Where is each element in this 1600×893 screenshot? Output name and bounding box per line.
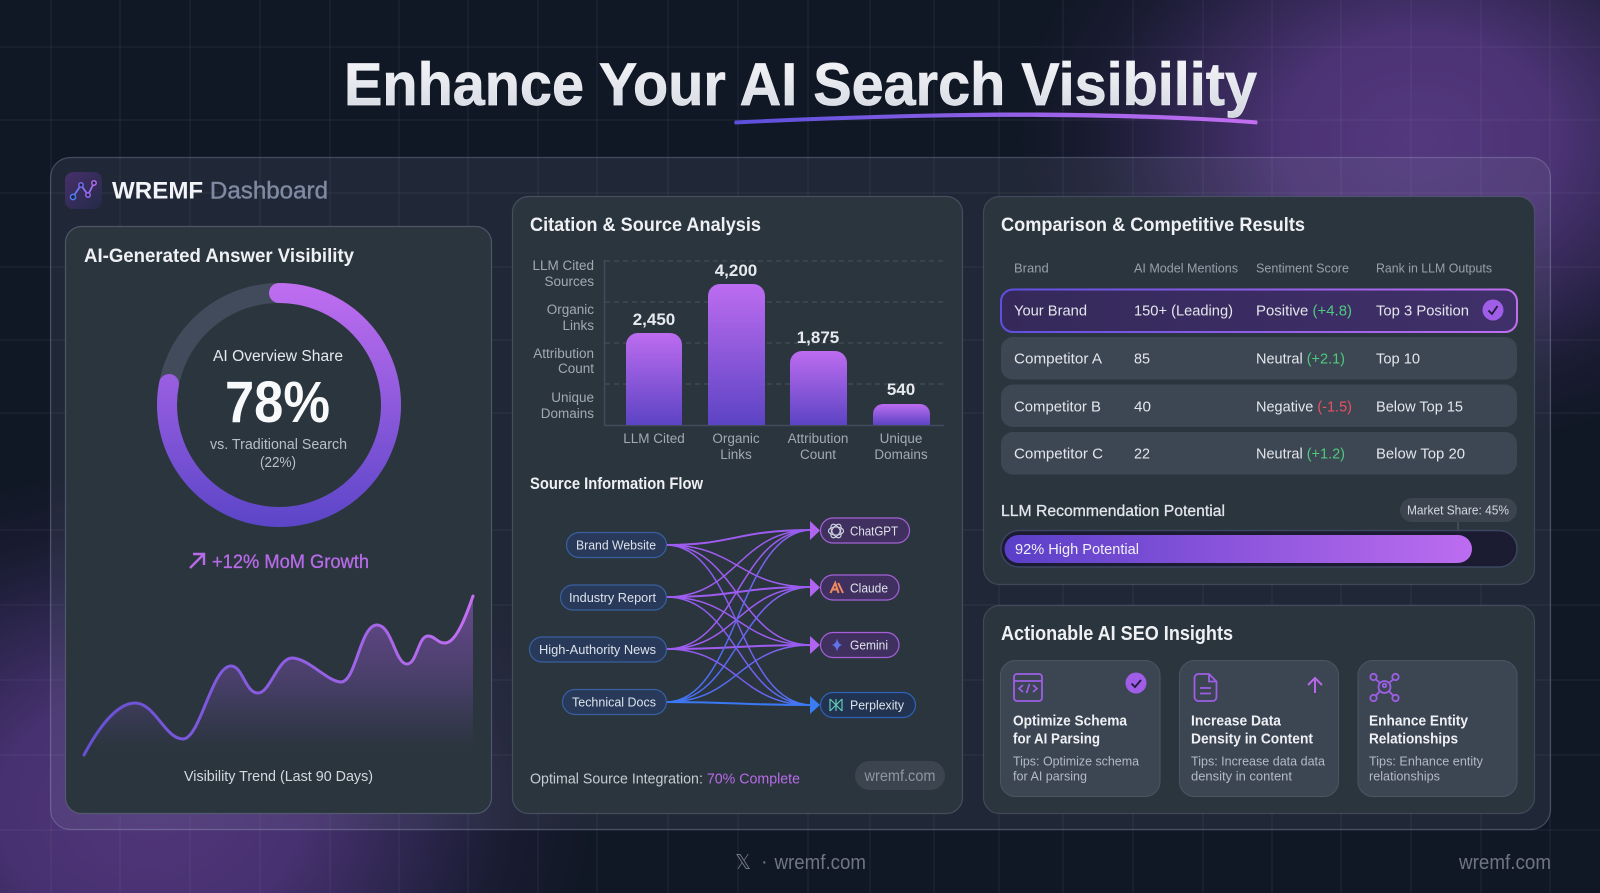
insight card: entity: Enhance Entity — [1369, 712, 1469, 730]
insight card: data density: Tips: Increase data data — [1191, 754, 1326, 768]
footer center: 𝕏 — [735, 850, 751, 874]
footer right: wremf.com — [1458, 852, 1551, 874]
footer center — [735, 850, 866, 874]
source pills — [530, 532, 666, 714]
bar values: 540 — [887, 380, 915, 399]
donut chart: AI Overview Share — [213, 348, 343, 365]
row: your brand — [1001, 290, 1517, 332]
table header: Rank in LLM Outputs — [1376, 260, 1492, 276]
icon: network — [1370, 674, 1399, 701]
row: competitor A: Top 10 — [1376, 350, 1420, 368]
source pills: Technical Docs — [572, 694, 656, 710]
y-axis labels: Count — [558, 361, 594, 376]
dashboard name: WREMF Dashboard — [112, 178, 328, 204]
donut chart: (22%) — [260, 455, 296, 471]
insight card: entity: Tips: Enhance entity — [1369, 754, 1483, 768]
x-axis labels: LLM Cited — [623, 431, 685, 446]
watermark pill: wremf.com — [864, 768, 936, 785]
footer center: wremf.com — [774, 852, 866, 874]
market share pill: Market Share: 45% — [1407, 504, 1509, 518]
area chart: visibility trend — [84, 596, 473, 755]
target: Gemini: Gemini — [850, 638, 888, 652]
watermark pill — [855, 761, 945, 790]
market share pill — [1400, 498, 1517, 532]
source pills: Brand Website — [576, 538, 656, 552]
y-axis labels: Attribution — [533, 346, 594, 361]
insight card: schema: Tips: Optimize schema — [1013, 754, 1140, 768]
insight card: schema: Optimize Schema — [1013, 712, 1128, 730]
icon: check badge — [1126, 672, 1146, 694]
row: competitor B: Negative (-1.5) — [1256, 398, 1352, 416]
target: Claude — [820, 575, 899, 600]
table header: Sentiment Score — [1256, 260, 1349, 276]
row: competitor A: 85 — [1134, 350, 1150, 368]
icon: up arrow — [1308, 678, 1322, 693]
flow diagram — [530, 518, 916, 718]
insight card: entity — [1358, 660, 1517, 796]
insight card: data density: density in content — [1191, 768, 1292, 784]
chart caption: Visibility Trend (Last 90 Days) — [184, 768, 373, 785]
table header: Brand — [1014, 260, 1049, 276]
heading: Comparison & Competitive Results — [1001, 214, 1305, 236]
icon: code window — [1014, 674, 1042, 701]
row: competitor C: Competitor C — [1014, 446, 1103, 462]
bar values: 2,450 — [633, 310, 675, 329]
bar chart — [532, 258, 944, 462]
insight card: entity: relationships — [1369, 768, 1440, 784]
heading: Citation & Source Analysis — [530, 214, 761, 236]
flow arrowheads — [810, 521, 820, 714]
x-axis labels: Attribution — [788, 431, 848, 446]
y-axis labels: Sources — [544, 274, 594, 289]
heading: AI-Generated Answer Visibility — [84, 245, 354, 267]
source pills: High-Authority News — [539, 642, 656, 657]
row: competitor A: Competitor A — [1014, 350, 1102, 368]
insight card: schema: for AI parsing — [1013, 768, 1087, 784]
x-axis labels: Links — [720, 447, 752, 462]
target: Perplexity: Perplexity — [850, 698, 904, 712]
insight card: schema: for AI Parsing — [1013, 730, 1100, 748]
y-axis labels: LLM Cited — [532, 258, 594, 273]
title: Enhance Your AI Search Visibility — [344, 51, 1258, 118]
icon: document — [1194, 674, 1216, 701]
insight card: schema — [1000, 660, 1160, 796]
row: competitor C: 22 — [1134, 446, 1150, 462]
progress bar — [1001, 530, 1517, 567]
flow lines — [666, 530, 812, 705]
y-axis labels — [532, 258, 594, 421]
progress bar: 92% High Potential — [1015, 541, 1139, 558]
growth indicator: +12% MoM Growth — [212, 552, 369, 573]
insight card: data density — [1180, 660, 1338, 796]
row: competitor B: Competitor B — [1014, 398, 1101, 416]
row: competitor B — [1001, 384, 1517, 427]
target: Gemini — [820, 632, 899, 658]
panel: AI-generated answer visibility — [66, 226, 492, 814]
y-axis labels: Domains — [541, 406, 594, 421]
panel: comparison and competitive results — [984, 196, 1534, 584]
panel: dashboard container — [50, 158, 1550, 830]
footer center: · — [761, 851, 768, 873]
row: competitor C: Neutral (+1.2) — [1256, 446, 1345, 462]
target: ChatGPT — [820, 518, 910, 543]
row: your brand: Positive (+4.8) — [1256, 302, 1352, 320]
bar values: 1,875 — [797, 328, 839, 347]
bars — [626, 284, 930, 425]
recommendation label: LLM Recommendation Potential — [1001, 503, 1225, 520]
insight card: data density: Increase Data — [1191, 712, 1282, 730]
dashboard header — [65, 172, 328, 209]
target: Perplexity — [820, 692, 916, 718]
row: competitor A — [1001, 337, 1517, 380]
row: your brand: Top 3 Position — [1376, 302, 1469, 320]
title underline — [734, 112, 1258, 124]
row: your brand: Your Brand — [1014, 302, 1087, 320]
row: competitor C: Below Top 20 — [1376, 446, 1465, 462]
donut chart — [167, 293, 391, 517]
row: your brand: 150+ (Leading) — [1134, 302, 1233, 320]
table header — [1014, 260, 1492, 276]
x-axis labels — [623, 431, 928, 462]
bar values: 4,200 — [715, 261, 757, 280]
integration status: Optimal Source Integration: 70% Complete — [530, 770, 800, 788]
subheading: Source Information Flow — [530, 475, 703, 493]
bar values — [633, 261, 915, 399]
y-axis labels: Links — [562, 318, 594, 333]
row: competitor B: Below Top 15 — [1376, 398, 1463, 416]
donut chart: 78% — [225, 370, 330, 435]
row: competitor C — [1001, 432, 1517, 474]
x-axis labels: Count — [800, 447, 836, 462]
x-axis labels: Organic — [712, 431, 760, 446]
y-axis labels: Organic — [547, 302, 594, 317]
target: ChatGPT: ChatGPT — [850, 524, 898, 538]
panel: citation and source analysis — [512, 196, 962, 814]
y-axis labels: Unique — [551, 390, 594, 405]
source pills: Industry Report — [569, 590, 656, 605]
x-axis labels: Unique — [880, 431, 922, 446]
table header: AI Model Mentions — [1134, 260, 1238, 276]
panel: actionable AI SEO insights — [984, 606, 1534, 814]
icon: check — [1482, 300, 1504, 320]
icon: dashboard logo — [65, 172, 102, 209]
target: Claude: Claude — [850, 580, 888, 596]
row: competitor A: Neutral (+2.1) — [1256, 350, 1345, 368]
donut chart: vs. Traditional Search — [210, 437, 347, 453]
x-axis labels: Domains — [874, 447, 928, 462]
row: competitor B: 40 — [1134, 398, 1151, 416]
insight card: data density: Density in Content — [1191, 730, 1313, 748]
insight card: entity: Relationships — [1369, 730, 1458, 748]
heading: Actionable AI SEO Insights — [1001, 623, 1233, 645]
